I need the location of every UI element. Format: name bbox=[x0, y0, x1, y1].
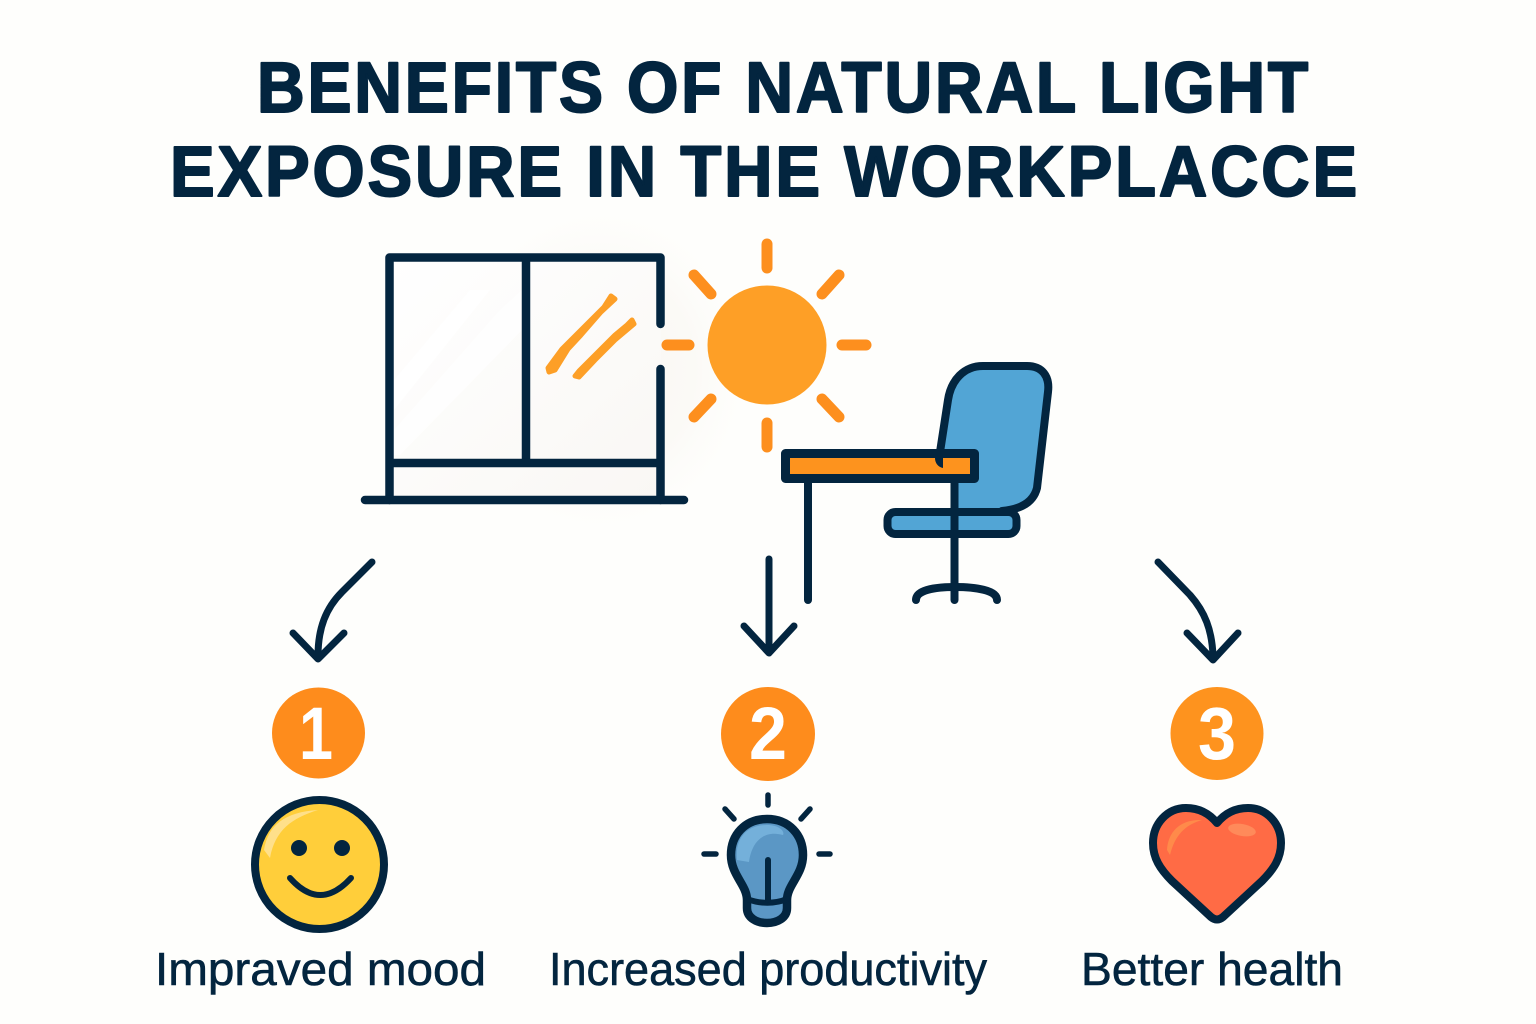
icon: smiley face bbox=[255, 800, 384, 929]
icon: light streaks on glass bbox=[548, 296, 634, 377]
badge: number 1: 1 bbox=[299, 692, 333, 775]
title bbox=[170, 49, 1360, 212]
badge: number 2 bbox=[721, 687, 815, 781]
badge: number 3: 3 bbox=[1198, 692, 1236, 775]
icon: heart bbox=[1153, 808, 1281, 920]
icon: chair bbox=[888, 366, 1048, 600]
arrow: to increased productivity bbox=[744, 559, 794, 653]
title: EXPOSURE IN THE WORKPLACCE bbox=[170, 133, 1360, 212]
icon: light bulb bbox=[704, 795, 830, 923]
illustration: sun bbox=[667, 244, 866, 447]
label: improved mood: Impraved mood bbox=[155, 943, 486, 995]
badge: number 1 bbox=[272, 688, 365, 778]
title: BENEFITS OF NATURAL LIGHT bbox=[257, 49, 1311, 128]
illustration: window bbox=[365, 257, 684, 500]
arrow: to better health bbox=[1158, 562, 1238, 660]
arrow: to improved mood bbox=[293, 562, 372, 659]
illustration: chair and desk bbox=[786, 366, 1048, 600]
badge: number 2: 2 bbox=[749, 692, 787, 775]
label: better health: Better health bbox=[1081, 943, 1343, 995]
icon: desk bbox=[786, 454, 974, 600]
label: increased productivity: Increased productivity bbox=[549, 943, 987, 995]
badge: number 3 bbox=[1170, 687, 1264, 780]
